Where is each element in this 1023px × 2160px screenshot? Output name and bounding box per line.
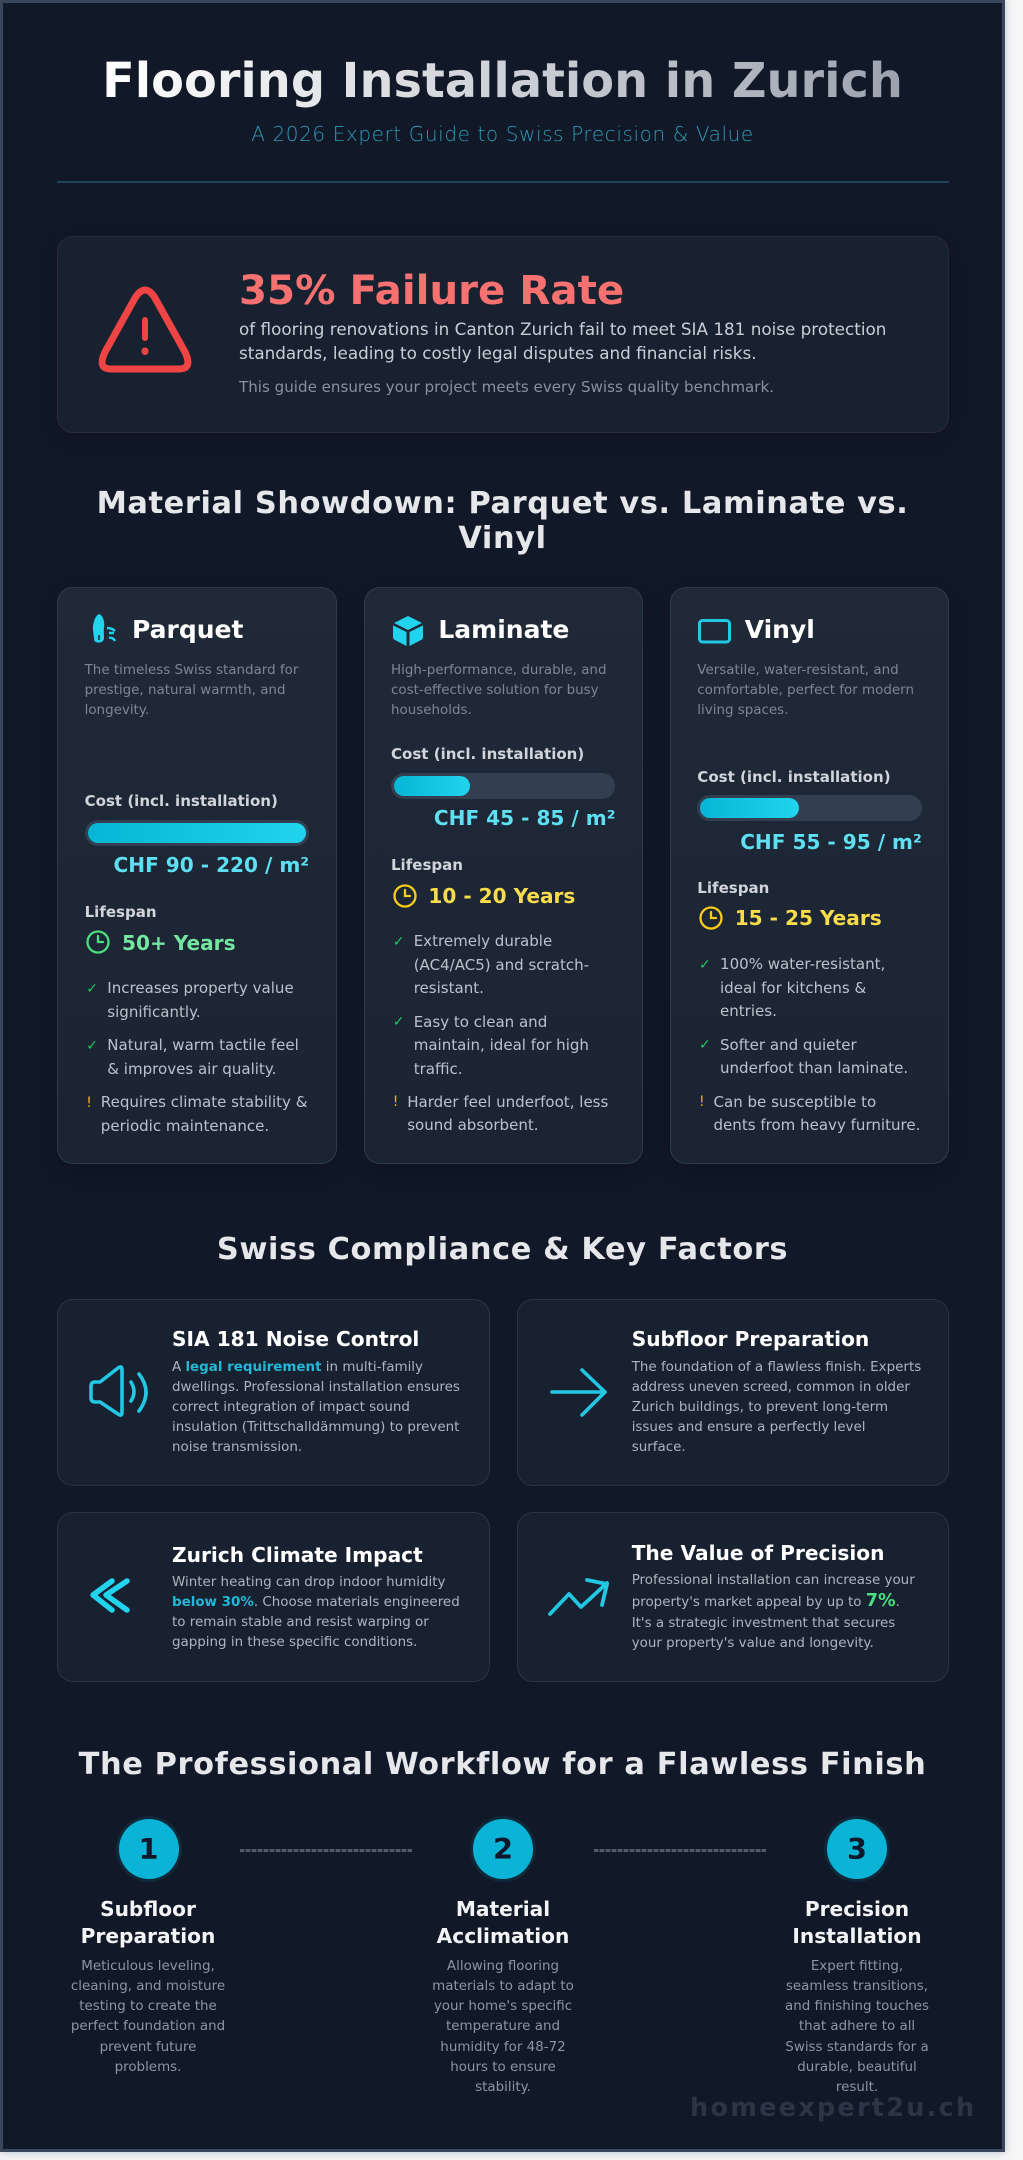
pros and cons: periodic maintenance. <box>101 1117 269 1135</box>
factor text: gapping in these specific conditions. <box>172 1635 417 1650</box>
step 2 badge: 2 <box>493 1832 513 1866</box>
step 1 text: perfect foundation and <box>71 2019 225 2034</box>
pros and cons: ✓ <box>699 957 711 973</box>
pros and cons: ! <box>393 1094 398 1110</box>
alert body <box>239 319 886 363</box>
factor title: SIA 181 Noise Control <box>172 1327 419 1351</box>
pros and cons: ideal for kitchens & <box>720 979 866 997</box>
lifespan value: 50+ Years <box>122 930 236 954</box>
step 1 text: Meticulous leveling, <box>81 1959 215 1974</box>
step 3 text: Expert fitting, <box>811 1959 903 1974</box>
cost label: Cost (incl. installation) <box>85 792 278 810</box>
step 2 text: hours to ensure <box>450 2060 556 2075</box>
icon: clock <box>393 884 417 908</box>
icon: speaker <box>89 1365 148 1417</box>
cost value: CHF 90 - 220 / m² <box>114 853 309 877</box>
pros and cons: ✓ <box>86 1038 98 1054</box>
step 2 title: Material <box>456 1896 550 1920</box>
factor text: issues and ensure a perfectly level <box>632 1420 866 1435</box>
step 1 text: problems. <box>115 2060 181 2075</box>
lifespan value: 10 - 20 Years <box>428 884 575 908</box>
factor text <box>632 1360 921 1455</box>
pros and cons: resistant. <box>414 979 484 997</box>
step 3 text: and finishing touches <box>785 1999 929 2014</box>
description <box>391 663 606 718</box>
heading: swiss compliance: Swiss Compliance & Key Factors <box>217 1232 788 1267</box>
description: longevity. <box>85 703 149 718</box>
factor text: correct integration of impact sound <box>172 1400 410 1415</box>
description: The timeless Swiss standard for <box>85 663 298 678</box>
factor text: It's a strategic investment that secures <box>632 1616 895 1631</box>
factor title: The Value of Precision <box>632 1541 884 1565</box>
factor text: Winter heating can drop indoor humidity <box>172 1575 445 1590</box>
title: Flooring Installation in Zurich <box>102 54 903 109</box>
icon: parquet sole <box>92 614 116 643</box>
icon: double chevron <box>90 1578 130 1613</box>
description: prestige, natural warmth, and <box>85 683 285 698</box>
pros and cons <box>393 932 608 1134</box>
pros and cons: entries. <box>720 1002 777 1020</box>
step 2 title <box>436 1896 569 1948</box>
card title: Vinyl <box>745 615 815 644</box>
cost value: CHF 55 - 95 / m² <box>740 830 922 854</box>
factor text: dwellings. Professional installation ensures <box>172 1380 460 1395</box>
step 1 text <box>71 1959 225 2075</box>
pros and cons: underfoot than laminate. <box>720 1059 908 1077</box>
cost label: Cost (incl. installation) <box>697 768 891 786</box>
pros and cons: ✓ <box>86 981 98 997</box>
factor text: property's market appeal by up to 7%. <box>632 1591 900 1611</box>
pros and cons: traffic. <box>414 1060 463 1078</box>
panel: parquet <box>57 587 337 1164</box>
step 3 text <box>785 1959 929 2095</box>
factor text: below 30%. Choose materials engineered <box>172 1595 460 1610</box>
step 3 text: seamless transitions, <box>786 1979 928 1994</box>
alert note: This guide ensures your project meets every Swiss quality benchmark. <box>239 378 774 396</box>
heading: material showdown: Vinyl <box>458 521 547 556</box>
factor title: Zurich Climate Impact <box>172 1543 423 1567</box>
step 2 badge <box>473 1819 533 1879</box>
factor text: A legal requirement in multi-family <box>172 1360 423 1374</box>
lifespan label: Lifespan <box>85 903 157 921</box>
step 1 badge: 1 <box>138 1832 159 1866</box>
description: Versatile, water-resistant, and <box>697 663 899 678</box>
cost bar <box>85 820 309 846</box>
lifespan label: Lifespan <box>697 878 769 896</box>
step 1 text: prevent future <box>100 2040 196 2055</box>
connector 1 <box>240 1849 412 1852</box>
step 3 text: that adhere to all <box>799 2019 915 2034</box>
step 2 text <box>432 1959 574 2095</box>
factor text: to remain stable and resist warping or <box>172 1615 429 1630</box>
panel: subfloor preparation <box>517 1299 949 1486</box>
alert heading: 35% Failure Rate <box>239 267 624 314</box>
cost value: CHF 45 - 85 / m² <box>434 806 615 830</box>
panel: vinyl <box>670 587 949 1164</box>
pros and cons: Softer and quieter <box>720 1036 857 1054</box>
description <box>697 663 914 718</box>
pros and cons: Natural, warm tactile feel <box>107 1036 299 1054</box>
factor text: The foundation of a flawless finish. Experts <box>632 1360 921 1374</box>
icon: warning triangle <box>98 286 192 372</box>
icon: vinyl plank <box>698 619 731 644</box>
step 3 badge <box>827 1819 887 1879</box>
step 2 text: Allowing flooring <box>447 1959 559 1974</box>
panel: failure rate alert <box>57 236 949 433</box>
heading: material showdown: Material Showdown: Parquet vs. Laminate vs. <box>97 486 908 521</box>
alert body: standards, leading to costly legal disputes and financial risks. <box>239 343 757 363</box>
icon: trend up <box>548 1578 609 1616</box>
icon: clock <box>86 930 110 954</box>
step 2 text: materials to adapt to <box>432 1979 574 1994</box>
step 3 badge: 3 <box>847 1832 867 1866</box>
pros and cons: Can be susceptible to <box>714 1092 876 1110</box>
watermark: homeexpert2u.ch <box>690 2093 976 2123</box>
factor text: surface. <box>632 1440 686 1455</box>
step 3 title <box>792 1896 922 1948</box>
step 1 text: cleaning, and moisture <box>71 1979 225 1994</box>
factor title: Subfloor Preparation <box>632 1327 869 1351</box>
pros and cons: ✓ <box>393 1014 404 1030</box>
pros and cons: maintain, ideal for high <box>414 1036 589 1054</box>
pros and cons: 100% water-resistant, <box>720 955 885 973</box>
cost bar <box>697 795 922 821</box>
factor text <box>632 1573 915 1651</box>
factor text: insulation (Trittschalldämmung) to prevent <box>172 1420 459 1435</box>
description: comfortable, perfect for modern <box>697 683 914 698</box>
lifespan value: 15 - 25 Years <box>735 906 882 930</box>
step 3 title: Precision <box>805 1896 909 1920</box>
pros and cons: sound absorbent. <box>407 1116 539 1134</box>
factor text: noise transmission. <box>172 1440 302 1455</box>
factor text <box>172 1575 460 1650</box>
icon: cube <box>393 616 423 646</box>
pros and cons: Increases property value <box>107 979 294 997</box>
factor text: address uneven screed, common in older <box>632 1380 910 1395</box>
step 3 text: durable, beautiful <box>797 2060 917 2075</box>
description: living spaces. <box>697 703 788 718</box>
cost label: Cost (incl. installation) <box>391 745 584 763</box>
pros and cons <box>699 955 920 1134</box>
pros and cons: significantly. <box>107 1003 201 1021</box>
card title: Laminate <box>438 615 569 644</box>
card title: Parquet <box>132 615 243 644</box>
factor text: Professional installation can increase your <box>632 1573 915 1588</box>
pros and cons: Extremely durable <box>414 932 552 950</box>
icon: clock <box>699 906 723 930</box>
step 1 text: testing to create the <box>79 1999 217 2014</box>
cost bar <box>391 772 615 798</box>
pros and cons: ! <box>86 1095 92 1111</box>
pros and cons: Harder feel underfoot, less <box>407 1092 608 1110</box>
connector 2 <box>594 1849 766 1852</box>
panel: laminate <box>364 587 643 1164</box>
pros and cons: Easy to clean and <box>414 1012 547 1030</box>
icon: arrow <box>550 1368 607 1417</box>
step 1 title: Subfloor <box>100 1896 196 1920</box>
step 1 title <box>81 1896 215 1948</box>
panel: sia 181 noise control <box>57 1299 490 1486</box>
factor text: your property's value and longevity. <box>632 1636 874 1651</box>
step 2 text: your home's specific <box>434 1999 572 2014</box>
description <box>84 663 298 718</box>
heading: material showdown <box>97 486 908 556</box>
step 2 text: stability. <box>475 2080 531 2095</box>
pros and cons: ! <box>699 1094 705 1110</box>
step 3 text: result. <box>836 2080 878 2095</box>
step 2 text: humidity for 48-72 <box>440 2040 566 2055</box>
factor text: Zurich buildings, to prevent long-term <box>632 1400 888 1415</box>
step 1 title: Preparation <box>81 1924 215 1948</box>
description: households. <box>391 703 472 718</box>
pros and cons <box>86 979 307 1135</box>
step 1 badge <box>118 1819 178 1879</box>
step 3 title: Installation <box>792 1924 922 1948</box>
pros and cons: ✓ <box>699 1037 711 1053</box>
header divider <box>57 181 949 183</box>
description: High-performance, durable, and <box>391 663 606 678</box>
subtitle: A 2026 Expert Guide to Swiss Precision & Value <box>251 122 754 146</box>
step 3 text: Swiss standards for a <box>785 2040 929 2055</box>
panel: zurich climate impact <box>57 1512 490 1682</box>
pros and cons: Requires climate stability & <box>101 1093 307 1111</box>
panel: value of precision <box>517 1512 949 1682</box>
step 2 title: Acclimation <box>437 1924 569 1948</box>
alert body: of flooring renovations in Canton Zurich fail to meet SIA 181 noise protection <box>239 319 886 339</box>
pros and cons: dents from heavy furniture. <box>714 1116 920 1134</box>
pros and cons: ✓ <box>393 934 404 950</box>
heading: professional workflow: The Professional Workflow for a Flawless Finish <box>79 1747 926 1782</box>
pros and cons: (AC4/AC5) and scratch- <box>414 956 589 974</box>
step 2 text: temperature and <box>446 2019 560 2034</box>
description: cost-effective solution for busy <box>391 683 599 698</box>
pros and cons: & improves air quality. <box>107 1060 276 1078</box>
lifespan label: Lifespan <box>391 856 463 874</box>
factor text <box>172 1360 460 1455</box>
